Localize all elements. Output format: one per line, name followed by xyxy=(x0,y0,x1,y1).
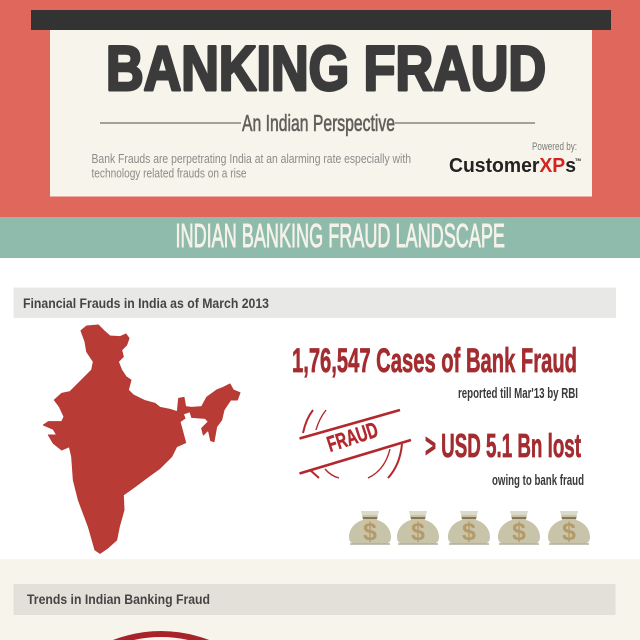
money bags: $ xyxy=(562,518,576,546)
stat: cases of bank fraud xyxy=(292,342,578,402)
page background: white section xyxy=(0,258,640,559)
money bags: $ xyxy=(512,518,526,546)
header background xyxy=(0,0,640,217)
page background: cream section xyxy=(0,559,640,640)
panel heading: financial frauds xyxy=(14,288,616,318)
subtitle with rules: An Indian Perspective xyxy=(242,110,395,136)
panel heading: trends: Trends in Indian Banking Fraud xyxy=(27,591,210,607)
money bags: $ xyxy=(363,518,377,546)
stat: usd lost: owing to bank fraud xyxy=(492,473,584,489)
stat: usd lost xyxy=(425,427,584,489)
powered by logo: CustomerXPs xyxy=(449,155,576,177)
India map xyxy=(43,325,240,553)
powered by logo: Powered by: xyxy=(532,141,577,153)
money bags xyxy=(349,511,590,546)
panel heading: trends xyxy=(14,584,616,615)
header card xyxy=(50,30,592,196)
intro text xyxy=(92,152,411,180)
chart ring top arc xyxy=(106,634,216,640)
money bags: $ xyxy=(462,518,476,546)
money bags: $ xyxy=(411,518,425,546)
powered by logo xyxy=(449,141,581,177)
section banner xyxy=(0,217,640,258)
fraud stamp: FRAUD xyxy=(324,417,381,457)
panel heading: financial frauds: Financial Frauds in India as of March 2013 xyxy=(23,295,269,311)
powered by logo: TM xyxy=(575,157,581,162)
intro text: Bank Frauds are perpetrating India at an alarming rate especially with xyxy=(92,152,411,166)
dark header bar xyxy=(31,10,611,30)
fraud stamp xyxy=(300,410,411,478)
title: BANKING FRAUD xyxy=(106,34,546,104)
stat: cases of bank fraud: reported till Mar'13 by RBI xyxy=(458,386,578,402)
intro text: technology related frauds on a rise xyxy=(92,166,247,180)
